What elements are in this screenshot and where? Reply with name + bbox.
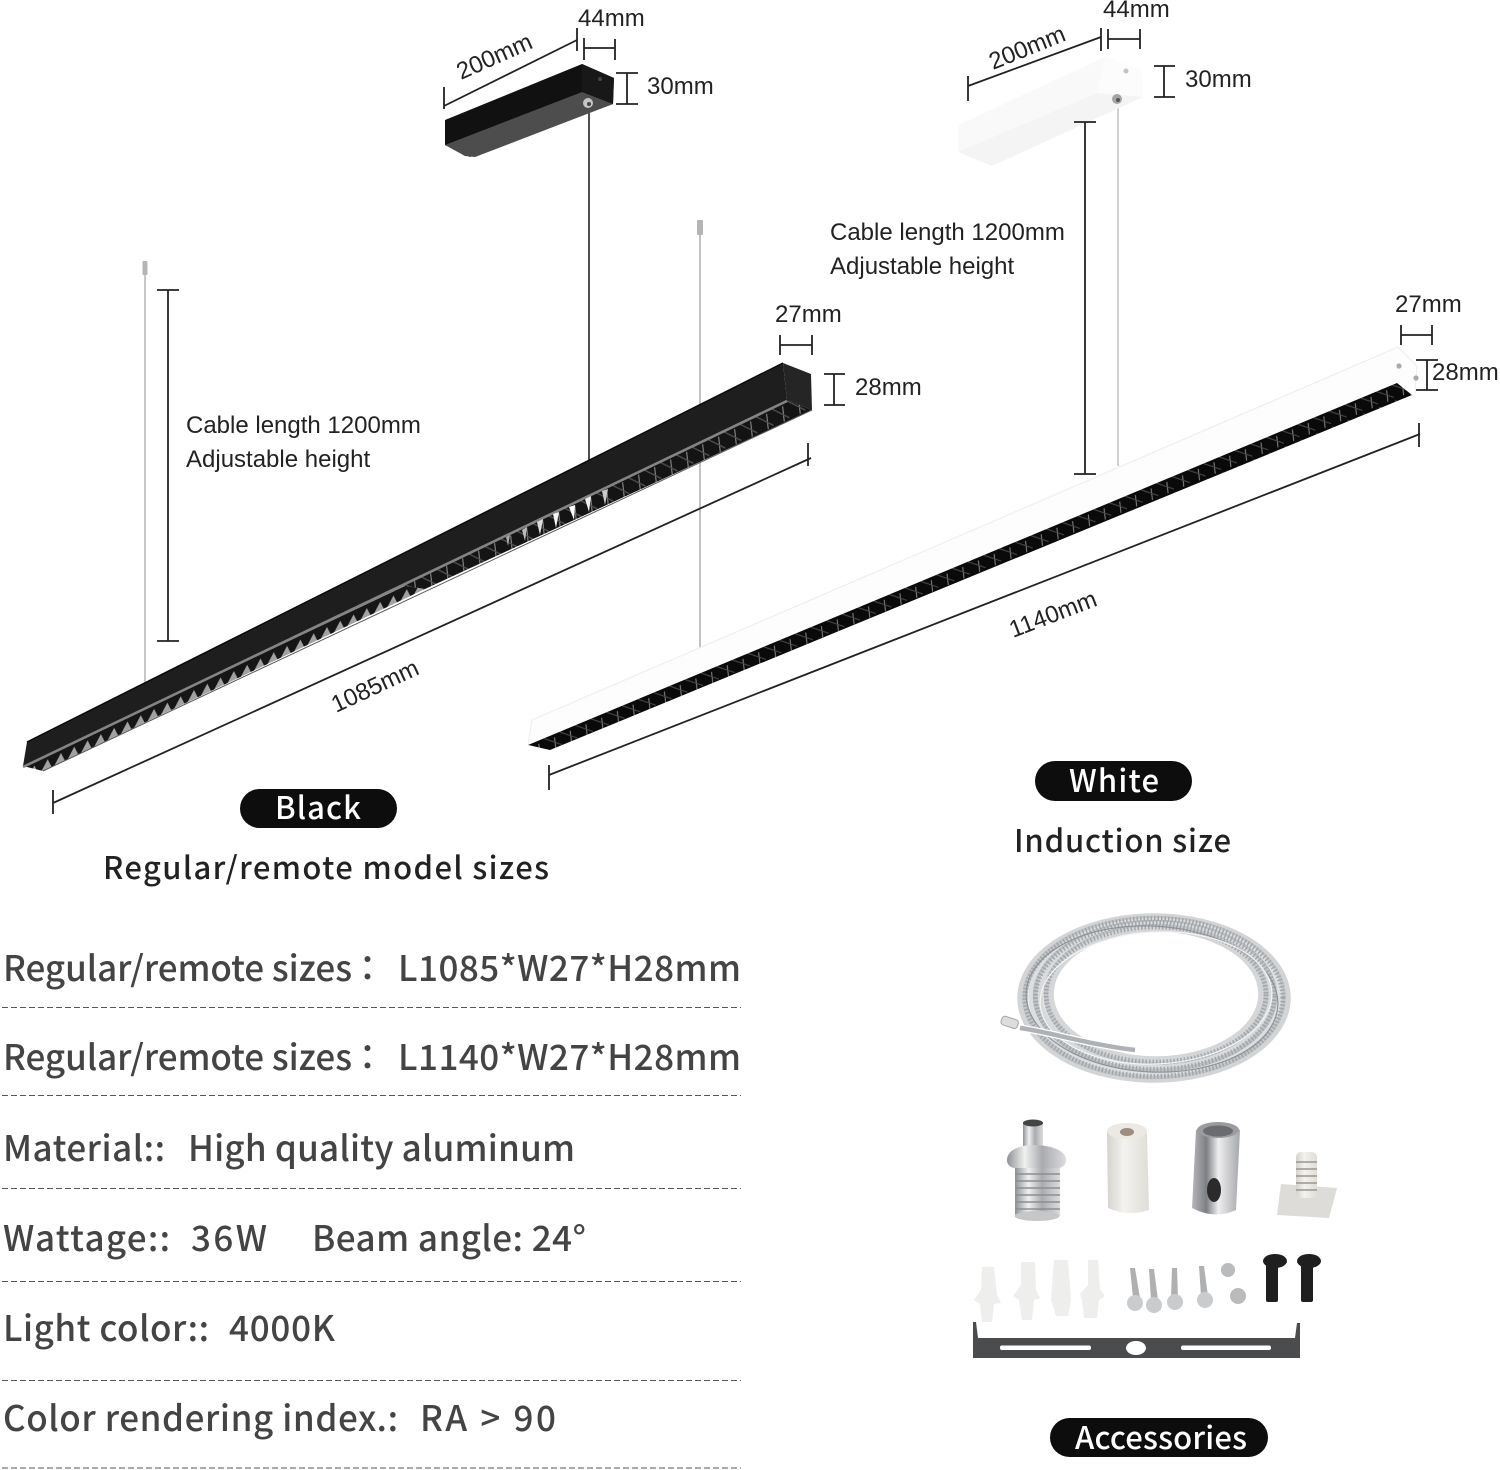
- dimensions: black model cable length: [157, 290, 421, 641]
- dimensions: black model bar section: [775, 301, 922, 405]
- spec: wattage and beam angle: 36W: [191, 1211, 267, 1262]
- accessory: black machine screws: [1263, 1254, 1321, 1302]
- spec: color rendering index: [2, 1391, 741, 1468]
- label: 28mm: 28mm: [1432, 359, 1499, 386]
- accessory: mounting bracket: [973, 1322, 1300, 1358]
- spec: wattage and beam angle: [2, 1211, 741, 1282]
- label: 27mm: 27mm: [1395, 291, 1462, 318]
- dimensions: white model length: [549, 423, 1420, 790]
- accessory: silver wood screws: [1127, 1266, 1213, 1313]
- label: 200mm: 200mm: [985, 21, 1069, 76]
- spec: regular/remote sizes 1085: [2, 941, 741, 1008]
- accessory: threaded cable gripper: [1007, 1120, 1066, 1221]
- spec: light color: [2, 1301, 741, 1380]
- label: 30mm: 30mm: [647, 73, 714, 100]
- spec: material: [2, 1121, 741, 1188]
- spec: color rendering index: Color rendering index.:: [3, 1391, 398, 1442]
- spec: regular/remote sizes 1085: ：: [350, 941, 385, 992]
- black model: right suspension cable: [697, 220, 703, 648]
- pill: Black: Black: [275, 783, 361, 828]
- label: cable length: Cable length 1200mm: [186, 412, 421, 439]
- pill: Accessories: Accessories: [1075, 1413, 1247, 1458]
- spec: color rendering index: RA > 90: [420, 1391, 556, 1442]
- pill: White: [1035, 756, 1192, 801]
- white linear light bar: [528, 347, 1419, 750]
- spec: light color: 4000K: [229, 1301, 336, 1352]
- label: adjustable height: Adjustable height: [186, 446, 370, 473]
- spec: light color: Light color::: [3, 1301, 209, 1352]
- accessory: chrome cylinder connector: [1192, 1122, 1240, 1215]
- black model: power cord from canopy: [588, 105, 590, 462]
- pill: White: White: [1069, 756, 1159, 801]
- dimensions: white model cable length: [830, 122, 1096, 474]
- dimensions: black model canopy: [444, 5, 714, 109]
- white model: suspension cable: [1117, 100, 1119, 466]
- label: 200mm: 200mm: [452, 28, 537, 85]
- spec: regular/remote sizes 1140: ：: [350, 1030, 385, 1081]
- label: 27mm: 27mm: [775, 301, 842, 328]
- dimensions: black model length: [53, 443, 811, 814]
- accessory: T-bolt: [1277, 1152, 1337, 1218]
- dimensions: white model canopy: [968, 0, 1252, 101]
- spec: regular/remote sizes 1085: Regular/remote sizes: [3, 941, 352, 992]
- black linear light bar: [23, 363, 812, 771]
- accessory: steel wire coil: [1000, 916, 1288, 1080]
- label: 28mm: 28mm: [855, 374, 922, 401]
- accessory: hex standoff: [1107, 1123, 1149, 1213]
- black canopy: [445, 64, 614, 157]
- caption: regular/remote model sizes: Regular/remote model sizes: [103, 843, 549, 888]
- dimensions: white model bar section: [1395, 291, 1499, 390]
- black model: left suspension cable: [142, 261, 148, 683]
- white canopy: [958, 57, 1143, 166]
- label: 1140mm: 1140mm: [1005, 586, 1101, 644]
- specification list: [2, 941, 741, 1468]
- spec: wattage and beam angle: Wattage::: [3, 1211, 170, 1262]
- accessory: plastic wall anchors: [974, 1260, 1105, 1322]
- label: 1085mm: 1085mm: [327, 655, 423, 718]
- spec: regular/remote sizes 1140: Regular/remote sizes: [3, 1030, 352, 1081]
- accessory: small nuts: [1221, 1263, 1246, 1304]
- spec: wattage and beam angle: Beam angle: 24°: [312, 1211, 586, 1262]
- pill: Black: [240, 783, 397, 828]
- label: 44mm: 44mm: [578, 5, 645, 32]
- spec: regular/remote sizes 1140: [2, 1030, 741, 1096]
- caption: induction size: Induction size: [1014, 816, 1231, 861]
- spec: regular/remote sizes 1140: L1140*W27*H28mm: [398, 1030, 741, 1081]
- label: 30mm: 30mm: [1185, 66, 1252, 93]
- spec: material: High quality aluminum: [188, 1121, 575, 1172]
- spec: material: Material::: [3, 1121, 165, 1172]
- spec: regular/remote sizes 1085: L1085*W27*H28mm: [398, 941, 741, 992]
- label: adjustable height: Adjustable height: [830, 253, 1014, 280]
- label: cable length: Cable length 1200mm: [830, 219, 1065, 246]
